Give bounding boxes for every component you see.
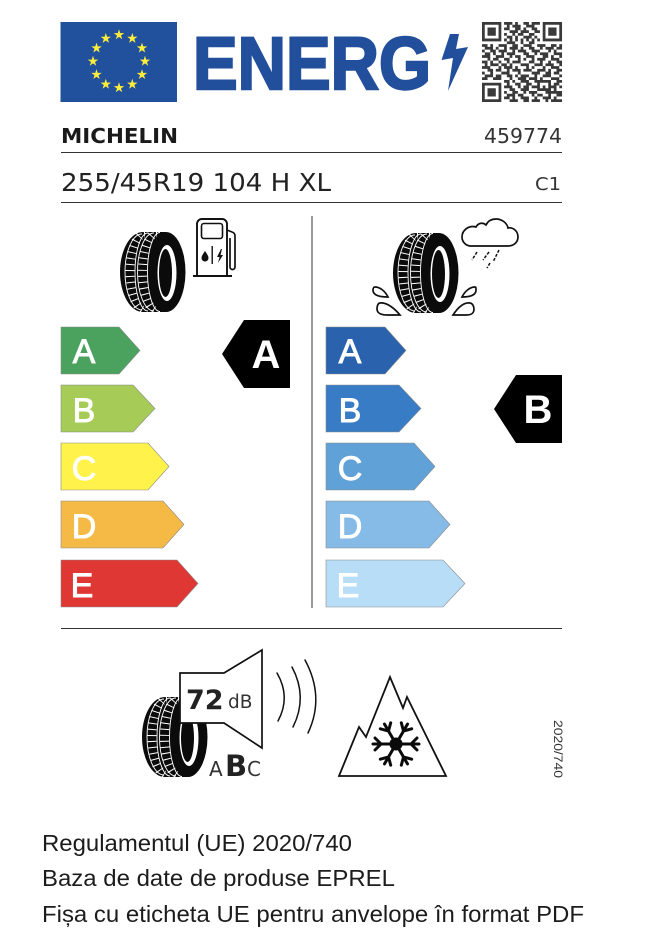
fuel rating badge: [222, 320, 290, 388]
icon: water splashes: [373, 287, 476, 315]
tyre class: C1: [535, 174, 561, 195]
fuel rating badge: A: [252, 333, 280, 377]
bar B: B: [339, 392, 361, 430]
bar D: [326, 501, 450, 548]
EU flag: [60, 22, 177, 102]
bar C: C: [72, 450, 96, 488]
divider: [61, 202, 562, 203]
bar E: [326, 560, 465, 607]
sound waves: [277, 660, 316, 733]
bar A: [61, 327, 140, 374]
bar B: [326, 385, 421, 432]
bar A: A: [339, 333, 362, 371]
bar E: [61, 560, 198, 607]
wet grip scale: [326, 327, 465, 607]
bar B: B: [73, 392, 95, 430]
noise class: A: [209, 757, 223, 781]
wet grip rating badge: [494, 375, 562, 443]
bar D: D: [72, 508, 96, 546]
footer text: [42, 830, 584, 927]
icon: tyre with fuel pump: [120, 219, 235, 312]
regulation number: 2020/740: [551, 720, 563, 778]
wet grip rating badge: B: [524, 388, 552, 432]
bar B: [61, 385, 155, 432]
bar A: A: [73, 333, 96, 371]
fuel efficiency scale: [61, 327, 198, 607]
icon: energy bolt: [442, 34, 468, 91]
bar E: E: [337, 567, 359, 605]
icon: snow mountain: [339, 677, 446, 776]
icon: rain cloud: [462, 219, 518, 268]
noise class: B: [225, 749, 247, 783]
icon: tyre with rain: [373, 219, 518, 315]
icon: snowflake: [373, 721, 419, 767]
divider: [61, 628, 562, 629]
article number: 459774: [484, 124, 562, 148]
footer line 3: Fișa cu eticheta UE pentru anvelope în format PDF: [42, 901, 584, 927]
QR code: [482, 23, 562, 101]
tyre size: 255/45R19 104 H XL: [61, 168, 331, 197]
bar D: [61, 501, 184, 548]
bar C: C: [338, 450, 362, 488]
bar C: [326, 443, 435, 490]
noise icon: [142, 650, 316, 783]
bar D: D: [338, 508, 362, 546]
brand name: MICHELIN: [61, 124, 178, 148]
noise unit: dB: [228, 692, 252, 713]
footer line 2: Baza de date de produse EPREL: [42, 865, 395, 891]
bar A: [326, 327, 406, 374]
noise class: [209, 749, 261, 783]
icon: fuel pump: [193, 219, 235, 276]
heading: ENERG: ENERG: [193, 22, 431, 105]
bar E: E: [71, 567, 93, 605]
column divider: [312, 216, 313, 608]
footer line 1: Regulamentul (UE) 2020/740: [42, 830, 352, 856]
noise value: 72: [186, 685, 224, 716]
bar C: [61, 443, 169, 490]
noise class: C: [247, 757, 261, 781]
divider: [61, 152, 562, 153]
speaker: [180, 650, 262, 748]
